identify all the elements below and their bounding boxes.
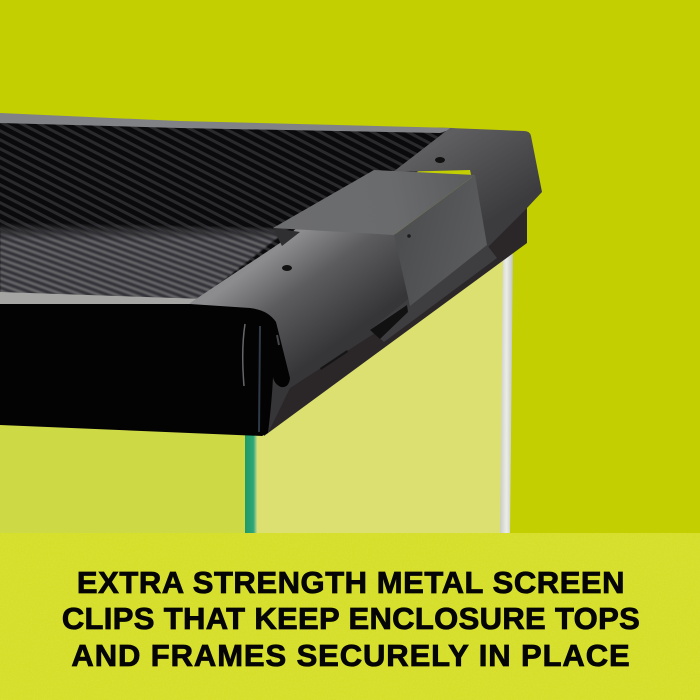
metal clip inner lip [273, 228, 300, 246]
lower rail slit [320, 350, 348, 370]
screw holes [282, 157, 445, 271]
frame underside band [262, 205, 527, 436]
caption texture [0, 533, 700, 700]
mesh screen [0, 120, 450, 306]
metal clip top [273, 170, 475, 235]
frame back edge [0, 113, 455, 133]
slit below clip [370, 305, 408, 339]
mesh: lit lower band [0, 222, 290, 303]
frame front rail [188, 225, 412, 433]
metal clip side [394, 175, 487, 306]
caption band [0, 533, 700, 700]
caption line 1: EXTRA STRENGTH METAL SCREEN [77, 565, 625, 600]
glass panel: right side [256, 255, 504, 533]
strip below clip [370, 245, 497, 342]
glass edge: green [245, 434, 257, 533]
glass edge: white [500, 250, 513, 533]
product photo: enclosure corner with screen clip [0, 113, 542, 533]
front frame highlights [243, 324, 245, 386]
front frame: black [0, 304, 290, 436]
caption line 2: CLIPS THAT KEEP ENCLOSURE TOPS [62, 601, 640, 636]
glass panel: front side [0, 422, 246, 533]
light frame strip below mesh [0, 292, 205, 306]
caption line 3: AND FRAMES SECURELY IN PLACE [71, 638, 631, 673]
frame right rail [393, 128, 542, 248]
